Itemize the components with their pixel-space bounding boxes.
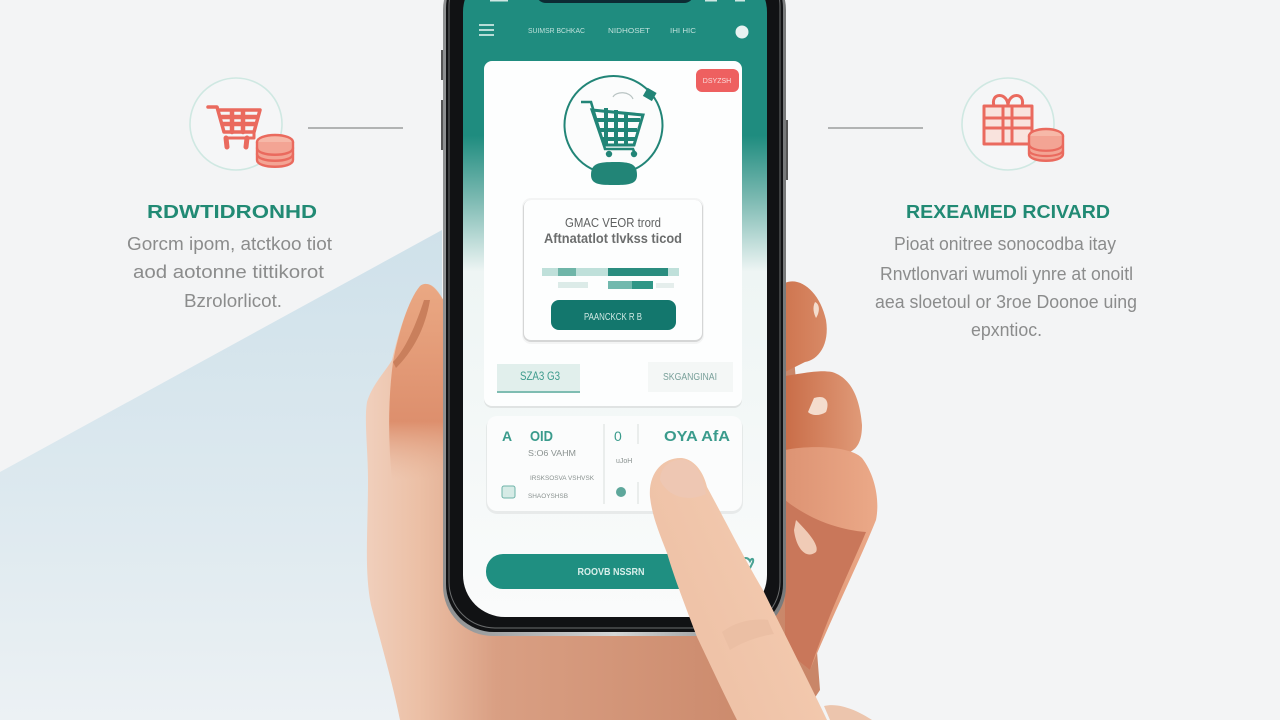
- rewards detail card: 0: [614, 428, 622, 444]
- cart illustration: [564, 76, 662, 185]
- rewards detail card: S:O6 VAHM: [528, 449, 576, 458]
- thumb crease: [393, 300, 430, 368]
- inner card button: PAANCKCK R B: [584, 312, 642, 323]
- menu icon: [479, 25, 494, 35]
- notch: [536, 0, 694, 3]
- left description: Gorcm ipom, atctkoo tiot: [127, 234, 332, 254]
- left description: Bzrolorlicot.: [184, 291, 282, 311]
- hand: pointing finger: [650, 458, 827, 720]
- rewards detail card: uJoH: [616, 458, 632, 465]
- rewards detail card: [486, 416, 743, 514]
- phone: [441, 0, 788, 636]
- finger one: [785, 281, 827, 372]
- icon: gift with coins: [962, 78, 1063, 170]
- right description: aea sloetoul or 3roe Doonoe uing: [875, 292, 1137, 312]
- status bar: [490, 0, 745, 2]
- profile icon: [736, 26, 748, 38]
- icon: shopping cart with coins: [190, 78, 293, 170]
- nav labels: NIDHOSET: [608, 28, 651, 35]
- red badge: DSYZSH: [703, 78, 731, 85]
- left heading: RDWTIDRONHD: [147, 202, 317, 222]
- thumb and palm shading: [389, 284, 446, 480]
- right description: Pioat onitree sonocodba itay: [894, 234, 1116, 254]
- tab: active: [497, 364, 580, 393]
- phone body: [443, 0, 786, 636]
- connector line left: [308, 127, 403, 129]
- hand: skin at bottom right: [824, 705, 872, 720]
- tab: active: SZA3 G3: [520, 369, 560, 383]
- nav labels: IHI HIC: [670, 28, 696, 35]
- bottom call to action button: [486, 554, 753, 589]
- rewards detail card: OYA AfA: [664, 428, 730, 445]
- finger three and palm edge: [785, 447, 877, 670]
- nav labels: SUIMSR BCHKAC: [528, 28, 585, 35]
- background blue diagonal panel: [0, 230, 442, 720]
- red badge: [696, 69, 739, 92]
- tab: inactive: SKGANGINAI: [663, 372, 717, 383]
- inner reward card: Aftnatatlot tlvkss ticod: [544, 230, 682, 246]
- palm: [366, 284, 820, 720]
- inner card text: GMAC VEOR trord: [565, 215, 661, 230]
- bottom call to action button: ROOVB NSSRN: [578, 567, 644, 578]
- inner card button: [551, 300, 676, 330]
- inner reward card: [522, 198, 704, 344]
- main card: [484, 61, 742, 408]
- connector line right: [828, 127, 923, 129]
- rewards detail card: OID: [530, 428, 553, 445]
- tab: inactive: [648, 362, 733, 392]
- finger knuckle shading: [722, 620, 774, 650]
- right heading: REXEAMED RCIVARD: [906, 202, 1110, 222]
- left description: [127, 234, 332, 311]
- rewards detail card: SHAOYSHSB: [528, 494, 568, 500]
- progress bars: [542, 268, 679, 289]
- side buttons: [441, 50, 788, 180]
- rewards detail card: IRSKSOSVA VSHVSK: [530, 476, 594, 482]
- rewards detail card: A: [502, 428, 512, 444]
- right description: epxntioc.: [971, 320, 1042, 340]
- fingernail: [660, 460, 706, 498]
- right description: Rnvtlonvari wumoli ynre at onoitl: [880, 264, 1133, 284]
- hand: palm and thumb behind phone: [366, 281, 877, 720]
- palm shadow right: [785, 500, 866, 670]
- right description: [875, 234, 1137, 340]
- left description: aod aotonne tittikorot: [133, 262, 324, 282]
- phone screen: [463, 0, 767, 617]
- highlights and nails: [808, 397, 828, 415]
- finger two: [785, 371, 862, 452]
- nav labels: [528, 28, 696, 35]
